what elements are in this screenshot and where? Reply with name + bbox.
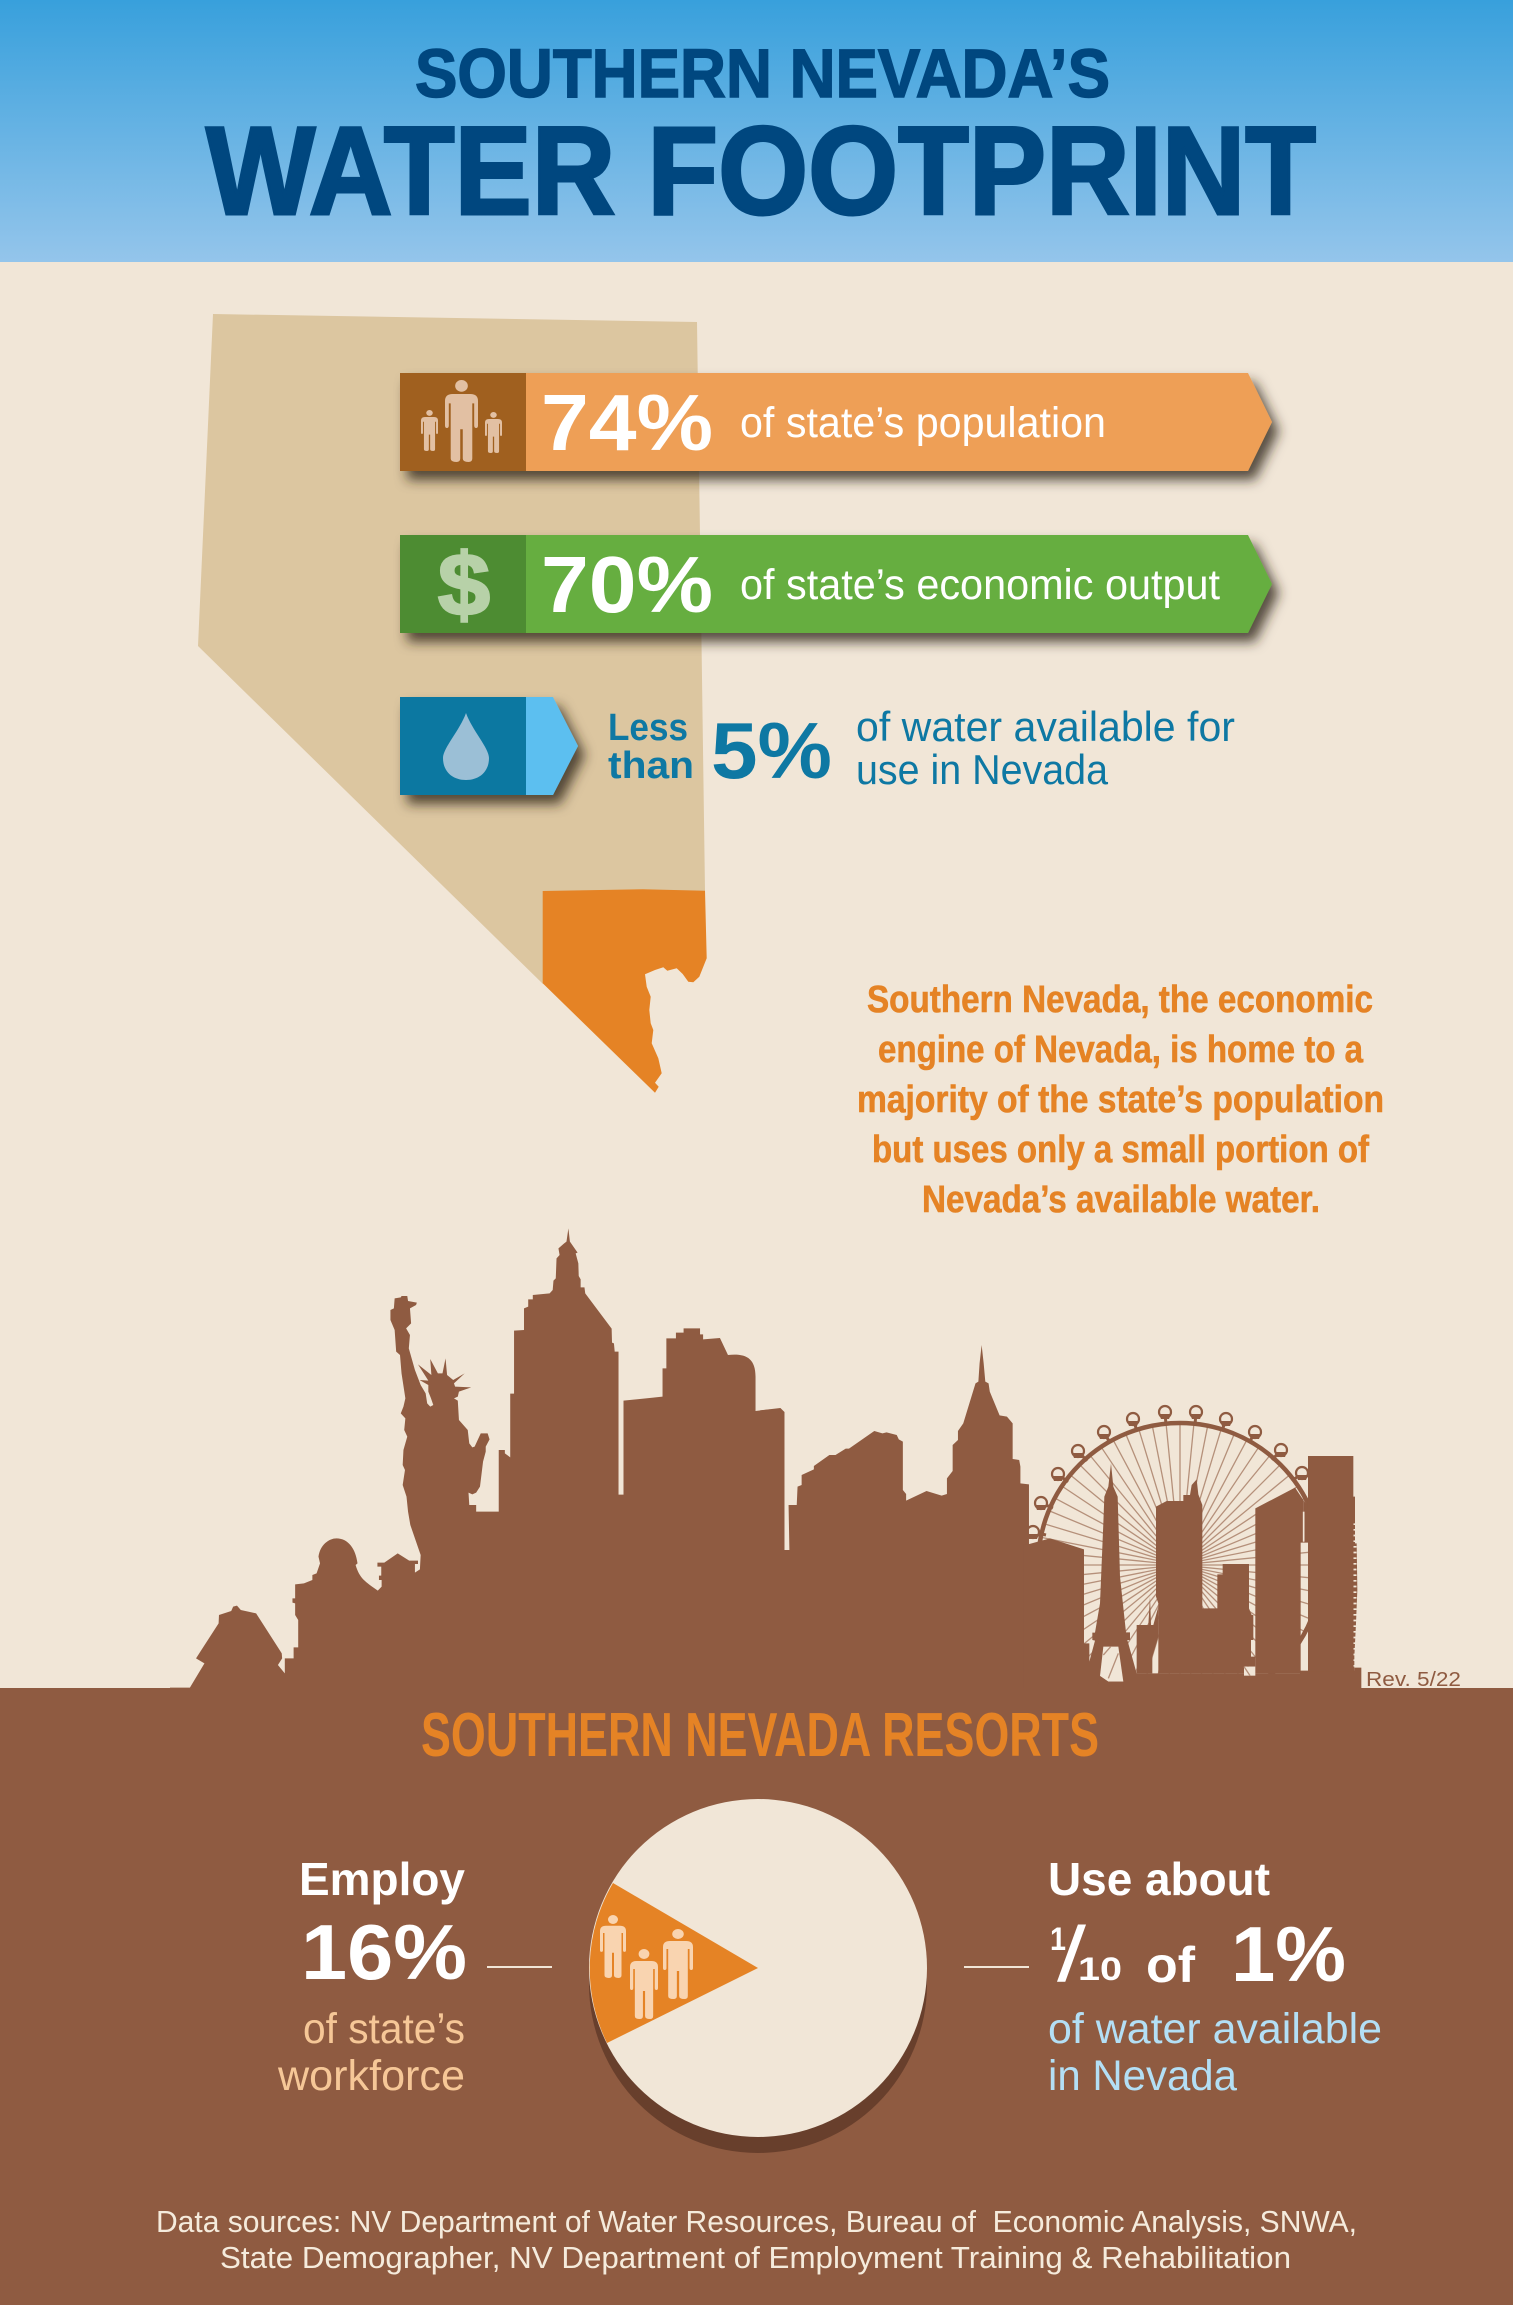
small tower <box>1137 1597 1158 1673</box>
title line 2: WATER FOOTPRINT <box>206 102 1316 241</box>
water figure: 5% <box>711 706 832 795</box>
figure one tenth of one percent: of <box>1146 1937 1195 1993</box>
Las Vegas skyline silhouette <box>0 1228 1513 2305</box>
employment label: of state’s <box>303 2005 465 2053</box>
eiffel tower arch <box>1100 1647 1123 1682</box>
water label: of water available for <box>856 703 1235 750</box>
gap strip above glass <box>1303 1500 1308 1543</box>
figure one tenth of one percent: 1 <box>1050 1921 1066 1957</box>
stat: water availability: than <box>608 745 694 787</box>
water icon tab <box>400 697 578 795</box>
right skyline: Eiffel tower and high-rises <box>1023 1456 1361 1690</box>
header banner <box>0 0 1513 262</box>
less than label: Less <box>608 707 688 749</box>
data sources: Data sources: NV Department of Water Resources, Bureau of Economic Analysis, SNWA, <box>156 2204 1357 2239</box>
orange summary paragraph: but uses only a small portion of <box>872 1129 1369 1171</box>
pie chart <box>589 1799 927 2153</box>
orange summary paragraph: majority of the state’s population <box>857 1079 1384 1121</box>
icon: family <box>421 380 502 462</box>
data sources: State Demographer, NV Department of Employment Training & Rehabilitation <box>220 2240 1291 2275</box>
southern Nevada highlighted region <box>543 889 707 1093</box>
middle skyline: hotel blocks and Empire State tower <box>760 1345 1029 1710</box>
revision note: Rev. 5/22 <box>1366 1669 1461 1691</box>
map of Nevada <box>198 314 707 1093</box>
connector line right <box>964 1966 1029 1968</box>
icon: dollar sign: $ <box>438 535 490 634</box>
connector line left <box>487 1966 552 1968</box>
orange summary paragraph: Southern Nevada, the economic <box>867 979 1373 1021</box>
population label: of state’s population <box>740 399 1106 447</box>
brown lower panel <box>0 1688 1513 2305</box>
stat: water availability: use in Nevada <box>856 746 1109 793</box>
icon: three workers <box>600 1915 693 2019</box>
left stat: employment: workforce <box>277 2052 465 2100</box>
heading: Southern Nevada Resorts: SOUTHERN NEVADA RESORTS <box>421 1701 1099 1770</box>
hotel block <box>1255 1488 1303 1673</box>
orange summary paragraph <box>857 979 1384 1221</box>
figure one tenth of one percent: 1% <box>1231 1910 1346 1998</box>
stat bar: economic output <box>400 535 1272 634</box>
icon: water drop <box>443 713 489 780</box>
title line 1: SOUTHERN NEVADA’S <box>415 35 1110 112</box>
figure 16%: 16% <box>301 1908 467 1996</box>
ferris wheel <box>1027 1406 1322 1707</box>
right stat: water use: Use about <box>1048 1853 1270 1905</box>
left stat: employment: Employ <box>299 1853 465 1905</box>
stat bar: population <box>400 373 1272 471</box>
population figure: 74% <box>541 378 713 467</box>
economic figure: 70% <box>541 540 713 629</box>
figure one tenth of one percent <box>1050 1910 1346 1998</box>
figure one tenth of one percent: / <box>1057 1910 1086 1998</box>
water use label: of water available <box>1048 2005 1382 2053</box>
pie slice: resort workforce share <box>590 1883 758 2043</box>
figure one tenth of one percent: 10 <box>1078 1951 1122 1987</box>
economic label: of state’s economic output <box>740 561 1220 609</box>
central tower <box>1156 1479 1255 1673</box>
orange summary paragraph: Nevada’s available water. <box>922 1179 1320 1221</box>
data sources <box>156 2204 1357 2275</box>
right stat: water use <box>964 1853 1382 2100</box>
tall tower <box>1308 1456 1357 1672</box>
left stat: employment <box>277 1853 552 2100</box>
left skyline: pyramid, dome, Statue of Liberty, towers <box>170 1228 770 1710</box>
stat: water availability <box>400 697 1235 795</box>
orange summary paragraph: engine of Nevada, is home to a <box>878 1029 1364 1071</box>
light notch <box>1244 1667 1255 1676</box>
right stat: water use: in Nevada <box>1048 2052 1237 2100</box>
